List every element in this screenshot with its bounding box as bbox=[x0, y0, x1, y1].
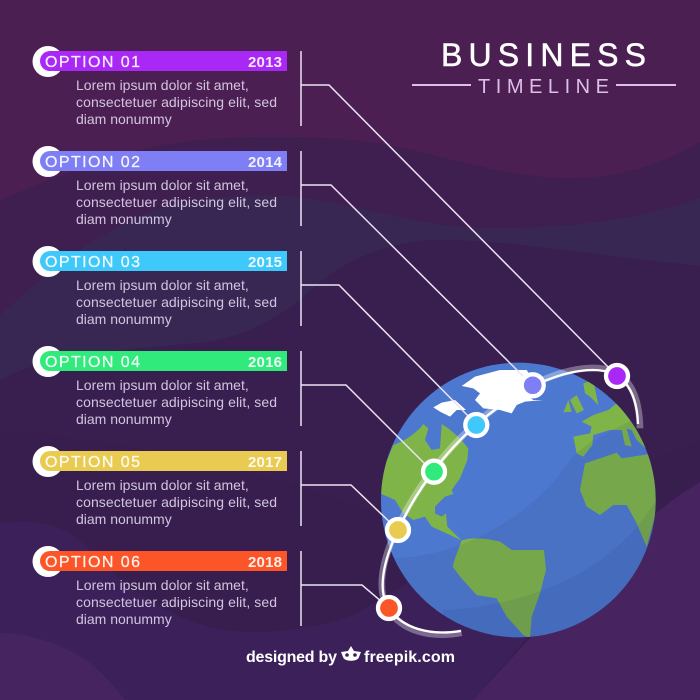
option 06 bbox=[32, 546, 287, 627]
option 04: OPTION 04 bbox=[45, 354, 140, 371]
option 03: Lorem ipsum dolor sit amet, bbox=[76, 277, 249, 293]
option 01: OPTION 01 bbox=[45, 54, 140, 71]
option 05 bbox=[32, 446, 287, 527]
title: Business Timeline: BUSINESS bbox=[441, 37, 646, 73]
markers bbox=[378, 365, 628, 619]
option 04: diam nonummy bbox=[76, 411, 172, 427]
option 06: 2018 bbox=[248, 554, 282, 571]
footer credit: freepik.com bbox=[364, 649, 455, 666]
title: Business Timeline bbox=[412, 37, 676, 98]
option 01: consectetuer adipiscing elit, sed bbox=[76, 94, 277, 110]
footer credit bbox=[246, 646, 455, 666]
option 05: diam nonummy bbox=[76, 511, 172, 527]
option 02: Lorem ipsum dolor sit amet, bbox=[76, 177, 249, 193]
globe ocean bbox=[381, 363, 656, 637]
option 05: Lorem ipsum dolor sit amet, bbox=[76, 477, 249, 493]
option 02: consectetuer adipiscing elit, sed bbox=[76, 194, 277, 210]
option 01 bbox=[32, 46, 287, 127]
option 03: OPTION 03 bbox=[45, 254, 140, 271]
option 04: Lorem ipsum dolor sit amet, bbox=[76, 377, 249, 393]
continents bbox=[380, 370, 658, 638]
option 03: diam nonummy bbox=[76, 311, 172, 327]
option 01: 2013 bbox=[248, 54, 282, 71]
option 02: 2014 bbox=[248, 154, 283, 171]
orbit bbox=[382, 368, 640, 635]
option 05: consectetuer adipiscing elit, sed bbox=[76, 494, 277, 510]
icon: freepik logo bbox=[341, 646, 361, 661]
option 03 bbox=[32, 246, 287, 327]
option 02: diam nonummy bbox=[76, 211, 172, 227]
connector lines bbox=[301, 51, 617, 626]
option 02: OPTION 02 bbox=[45, 154, 140, 171]
option 02 bbox=[32, 146, 287, 227]
option 05: OPTION 05 bbox=[45, 454, 140, 471]
option 04 bbox=[32, 346, 287, 427]
option 01: Lorem ipsum dolor sit amet, bbox=[76, 77, 249, 93]
option 06: OPTION 06 bbox=[45, 554, 140, 571]
option 06: Lorem ipsum dolor sit amet, bbox=[76, 577, 249, 593]
option 05: 2017 bbox=[248, 454, 282, 471]
option 04: 2016 bbox=[248, 354, 282, 371]
title: Business Timeline: TIMELINE bbox=[478, 76, 609, 98]
option 03: 2015 bbox=[248, 254, 282, 271]
globe with orbit bbox=[378, 362, 656, 638]
option 06: consectetuer adipiscing elit, sed bbox=[76, 594, 277, 610]
option 06: diam nonummy bbox=[76, 611, 172, 627]
option 01: diam nonummy bbox=[76, 111, 172, 127]
globe shading bbox=[394, 422, 656, 638]
option 03: consectetuer adipiscing elit, sed bbox=[76, 294, 277, 310]
footer credit: designed by bbox=[246, 649, 337, 666]
option 04: consectetuer adipiscing elit, sed bbox=[76, 394, 277, 410]
